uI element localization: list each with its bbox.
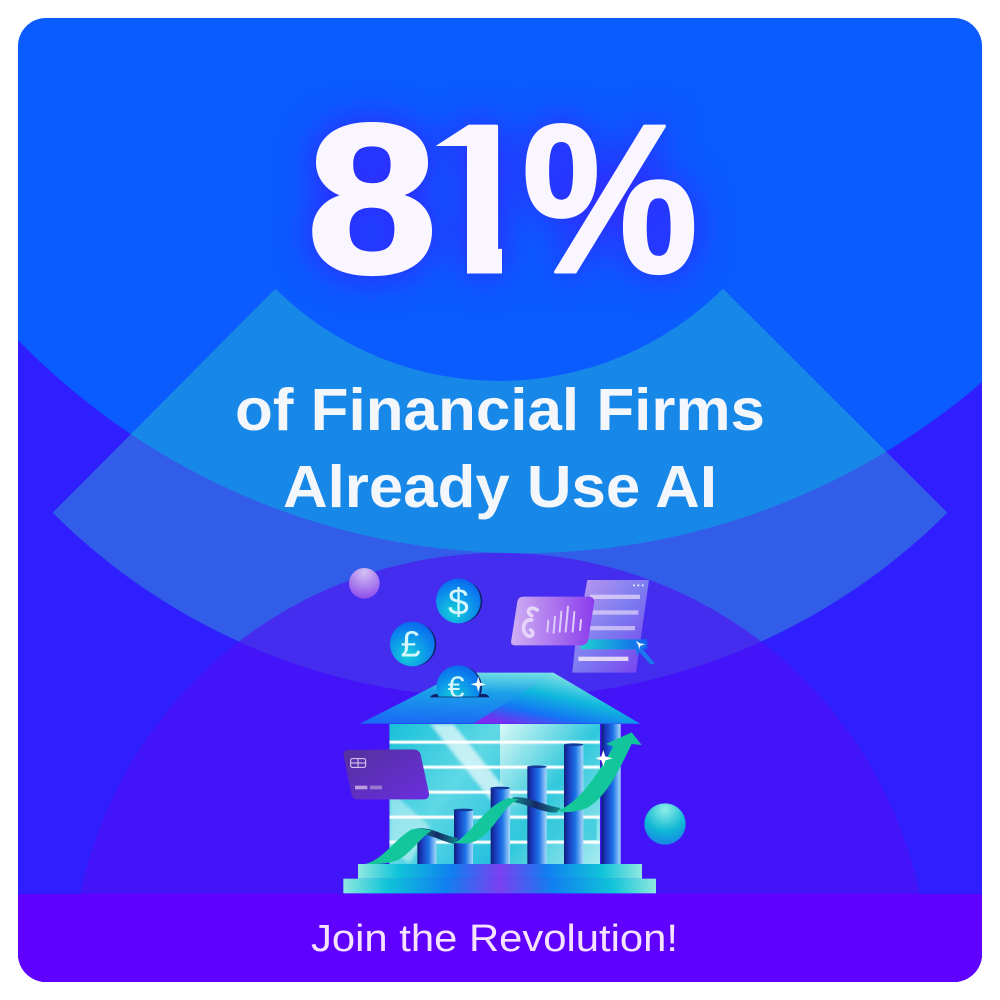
- footer call to action: Join the Revolution!: [311, 918, 678, 960]
- icon: euro coin dropping into roof slot: €: [447, 670, 465, 704]
- footer bar: [18, 894, 982, 982]
- big statistic: 81%: 8: [307, 80, 437, 317]
- purple dome behind illustration: [80, 553, 920, 894]
- bank wall: [389, 724, 600, 864]
- bank illustration: [343, 568, 686, 893]
- icon: credit card: [343, 749, 429, 799]
- roof: [360, 673, 640, 724]
- big statistic: 81%: %: [522, 80, 698, 317]
- icon: chart card: [511, 597, 594, 645]
- bar-chart columns: [417, 724, 621, 864]
- big statistic: 81%: 1: [418, 80, 536, 317]
- plinth steps: [343, 864, 656, 893]
- icon: dashboard panel: [572, 580, 655, 673]
- icon: dollar coin: $: [448, 581, 469, 623]
- heading: of Financial Firms Already Use AI: [235, 377, 765, 520]
- icon: pound coin: [390, 622, 436, 666]
- big statistic: 81%: [294, 101, 714, 297]
- translucent fan-shaped band: [53, 289, 947, 698]
- heading: of Financial Firms Already Use AI: of Financial Firms: [235, 377, 765, 443]
- lower indigo area: [18, 340, 982, 982]
- icon: euro coin dropping into roof slot: [430, 665, 490, 698]
- icon: teal sphere: [644, 803, 686, 845]
- icon: dollar coin: [436, 579, 482, 623]
- icon: purple sphere: [349, 568, 380, 599]
- icon: cursor: [634, 643, 655, 665]
- growth arrow ribbon: [365, 732, 642, 864]
- heading: of Financial Firms Already Use AI: Already Use AI: [283, 454, 717, 520]
- icon: pound coin: £: [401, 624, 421, 665]
